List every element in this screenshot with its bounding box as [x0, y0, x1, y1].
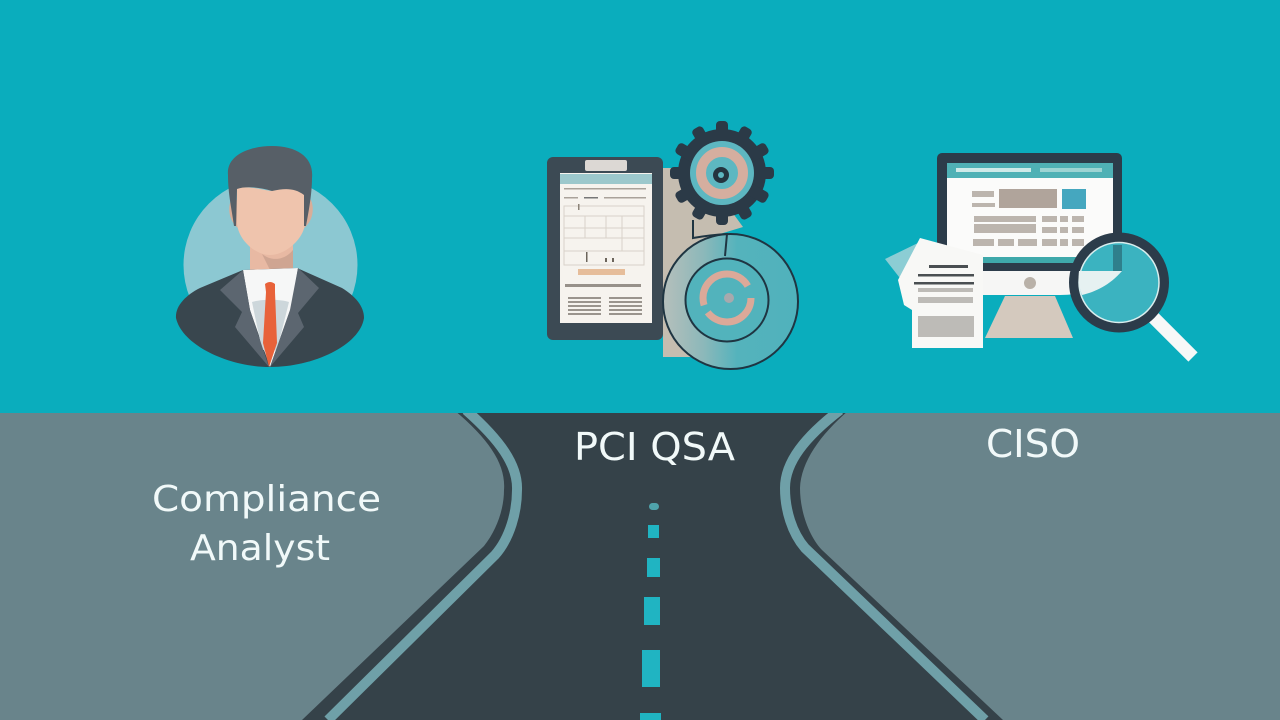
label: Compliance Analyst: Analyst [190, 528, 330, 569]
clipboard board [547, 157, 663, 340]
label: CISO: CISO [986, 422, 1080, 466]
magnifier [1074, 238, 1193, 357]
documents [885, 238, 983, 348]
icon: clipboard with gears [547, 121, 798, 369]
clipboard clip [585, 160, 627, 171]
road centre dashes [640, 503, 661, 720]
icon: large disc gear [663, 220, 798, 369]
monitor base [960, 271, 1122, 295]
label: Compliance Analyst [152, 479, 381, 569]
monitor screen [937, 153, 1122, 271]
clipboard form paper [560, 173, 652, 323]
road [302, 410, 1003, 720]
panel: grey lower background [0, 413, 1280, 720]
panel: teal upper background [0, 0, 1280, 413]
icon: monitor with magnifier and documents [885, 153, 1193, 357]
label: PCI QSA: PCI QSA [574, 425, 735, 469]
label: Compliance Analyst: Compliance [152, 479, 381, 520]
icon: small dark gear [670, 121, 774, 225]
icon: compliance analyst person [176, 146, 364, 367]
monitor stand [985, 296, 1073, 338]
